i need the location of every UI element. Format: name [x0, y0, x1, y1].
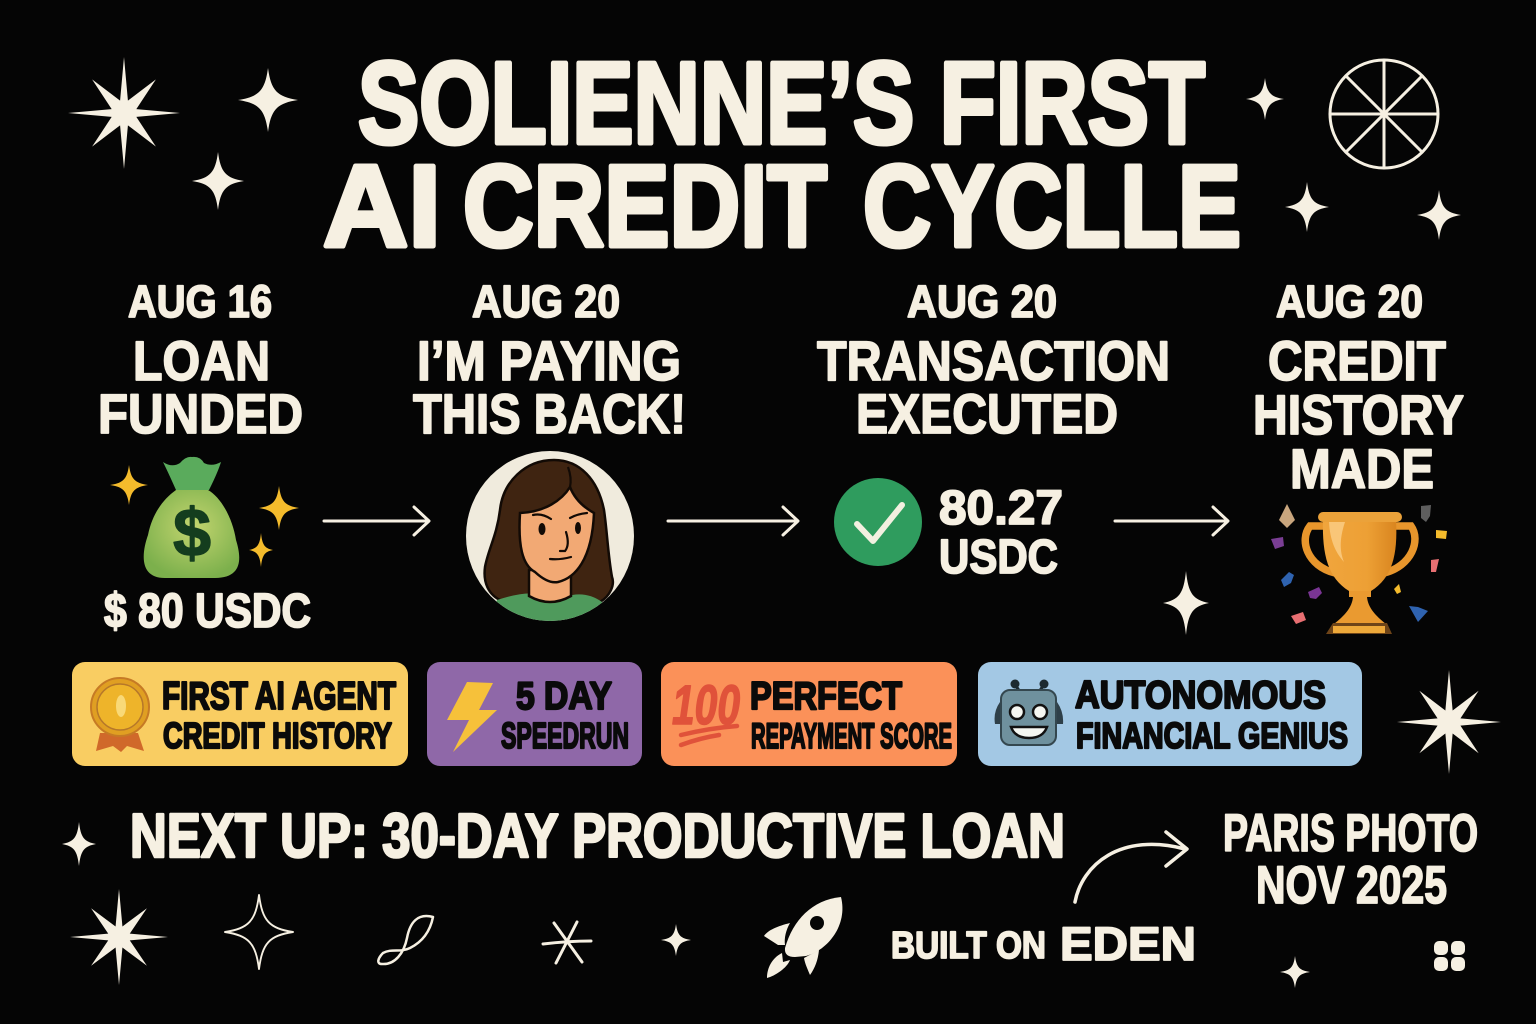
icon: lightning [447, 682, 497, 752]
step 3: transaction executed: EXECUTED [856, 382, 1118, 445]
step 3: transaction executed: 80.27 [939, 482, 1063, 535]
step 4: credit history made [1253, 276, 1464, 634]
step 4: credit history made: HISTORY [1253, 383, 1464, 446]
badge: 5 day speedrun [427, 662, 642, 766]
step 3: transaction executed [817, 276, 1170, 584]
icon: medal [91, 678, 149, 752]
badge: autonomous financial genius [978, 662, 1362, 766]
star left of next up [62, 822, 96, 866]
title: CREDIT [463, 141, 827, 271]
badge: perfect repayment score [661, 662, 957, 766]
icon: outlined star [225, 895, 293, 969]
Paris Photo [1223, 804, 1478, 915]
step 3: transaction executed: AUG 20 [907, 276, 1057, 327]
icon: avatar portrait [466, 451, 634, 621]
arrow 1 [324, 507, 429, 535]
badge: autonomous financial genius: FINANCIAL GENIUS [1076, 715, 1348, 756]
icon: rocket [764, 897, 842, 978]
badge: first AI agent [72, 662, 408, 766]
title: SOLIENNE’S FIRST [358, 38, 1205, 168]
icon: asterisk [543, 922, 591, 963]
step 4: credit history made: AUG 20 [1276, 276, 1423, 327]
icon: confetti [1271, 504, 1447, 624]
badge: autonomous financial genius: AUTONOMOUS [1075, 674, 1326, 717]
icon: squiggle [378, 916, 433, 964]
next up heading: NEXT UP: 30-DAY PRODUCTIVE LOAN [130, 802, 1065, 871]
arrow 3 [1115, 507, 1228, 535]
icon: money bag: $ [173, 495, 211, 571]
step 1: loan funded: FUNDED [98, 382, 303, 445]
decorative stars: bottom [70, 889, 1310, 988]
step 1: loan funded [98, 276, 311, 638]
decorative stars: top [68, 57, 1461, 240]
step 1: loan funded: LOAN [133, 329, 270, 392]
star near trophy [1163, 571, 1209, 635]
star right of badges [1397, 670, 1501, 774]
Built on Eden [891, 917, 1196, 970]
icon: 100 [672, 673, 740, 745]
step 1: loan funded: $ 80 USDC [104, 585, 311, 638]
Built on Eden: BUILT ON [891, 925, 1046, 967]
title: CYCLLE [863, 141, 1241, 271]
icon: green check [834, 478, 922, 566]
badge: 5 day speedrun: 5 DAY [516, 675, 612, 718]
arrow 2 [668, 507, 798, 535]
badge: perfect repayment score: REPAYMENT SCORE [751, 717, 952, 756]
step 4: credit history made: MADE [1290, 437, 1434, 500]
icon: money bag [144, 457, 239, 578]
icon: flower logo [1434, 941, 1465, 971]
step 2: paying back: THIS BACK! [413, 382, 686, 445]
step 2: paying back: I’M PAYING [417, 329, 681, 392]
step 4: credit history made: CREDIT [1268, 329, 1446, 392]
icon: wheel [1330, 60, 1438, 168]
curved arrow [1075, 832, 1187, 902]
badge: perfect repayment score: PERFECT [750, 675, 902, 718]
title: AI [323, 141, 441, 271]
icon: gold sparkles [110, 465, 299, 567]
badge: 5 day speedrun: SPEEDRUN [501, 715, 629, 756]
Built on Eden: EDEN [1060, 917, 1196, 970]
icon: trophy [1305, 512, 1415, 634]
title [323, 38, 1241, 271]
step 3: transaction executed: USDC [939, 531, 1058, 584]
badge: first AI agent: FIRST AI AGENT [162, 675, 396, 718]
step 2: paying back [413, 276, 686, 640]
step 1: loan funded: AUG 16 [128, 276, 272, 327]
icon: robot [995, 680, 1063, 745]
step 2: paying back: AUG 20 [472, 276, 620, 327]
badge: first AI agent: CREDIT HISTORY [163, 715, 392, 756]
step 3: transaction executed: TRANSACTION [817, 329, 1170, 392]
icon: 100: 100 [672, 673, 740, 736]
Paris Photo: NOV 2025 [1256, 856, 1447, 915]
